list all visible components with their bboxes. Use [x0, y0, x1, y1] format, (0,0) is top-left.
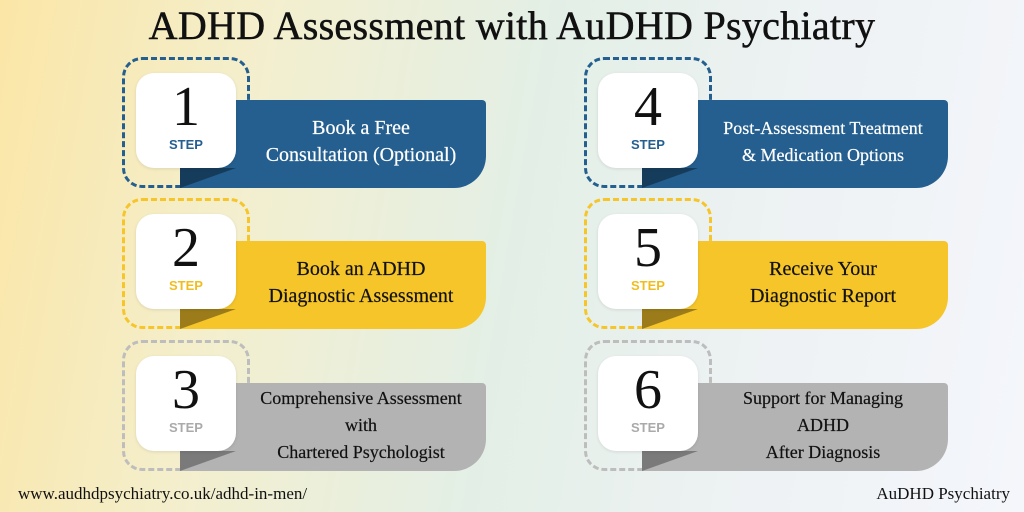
step 2: Diagnostic Assessment: [268, 285, 454, 307]
step 1: STEP: [169, 137, 203, 152]
step 6: Support for Managing: [743, 388, 903, 408]
step 5: Receive Your: [769, 258, 877, 280]
footer url: www.audhdpsychiatry.co.uk/adhd-in-men/: [18, 484, 307, 503]
step 1: 1: [172, 76, 200, 138]
footer brand: AuDHD Psychiatry: [876, 484, 1010, 503]
step 5: 5: [634, 217, 662, 279]
step 3: 3: [172, 359, 200, 421]
step 4: STEP: [631, 137, 665, 152]
step 4: & Medication Options: [742, 145, 904, 165]
step 5: [584, 198, 948, 329]
step 6: After Diagnosis: [766, 442, 880, 462]
step 2: Book an ADHD: [297, 258, 425, 280]
step 4: 4: [634, 76, 662, 138]
step 6: ADHD: [797, 414, 849, 434]
step 4: Post-Assessment Treatment: [723, 118, 923, 138]
step 1: Book a Free: [312, 117, 410, 139]
step 2: 2: [172, 217, 200, 279]
step 2: [122, 198, 486, 329]
step 6: 6: [634, 359, 662, 421]
step 3: Chartered Psychologist: [277, 442, 445, 462]
step 3: STEP: [169, 420, 203, 435]
step 6: [584, 340, 948, 471]
step 1: [122, 57, 486, 188]
title: ADHD Assessment with AuDHD Psychiatry: [149, 3, 875, 48]
step 4: [584, 57, 948, 188]
step 6: STEP: [631, 420, 665, 435]
step 3: [122, 340, 486, 471]
step 2: STEP: [169, 278, 203, 293]
step 1: Consultation (Optional): [266, 144, 456, 166]
step 5: Diagnostic Report: [750, 285, 896, 307]
step 5: STEP: [631, 278, 665, 293]
step 3: with: [345, 414, 377, 434]
step 3: Comprehensive Assessment: [260, 388, 462, 408]
